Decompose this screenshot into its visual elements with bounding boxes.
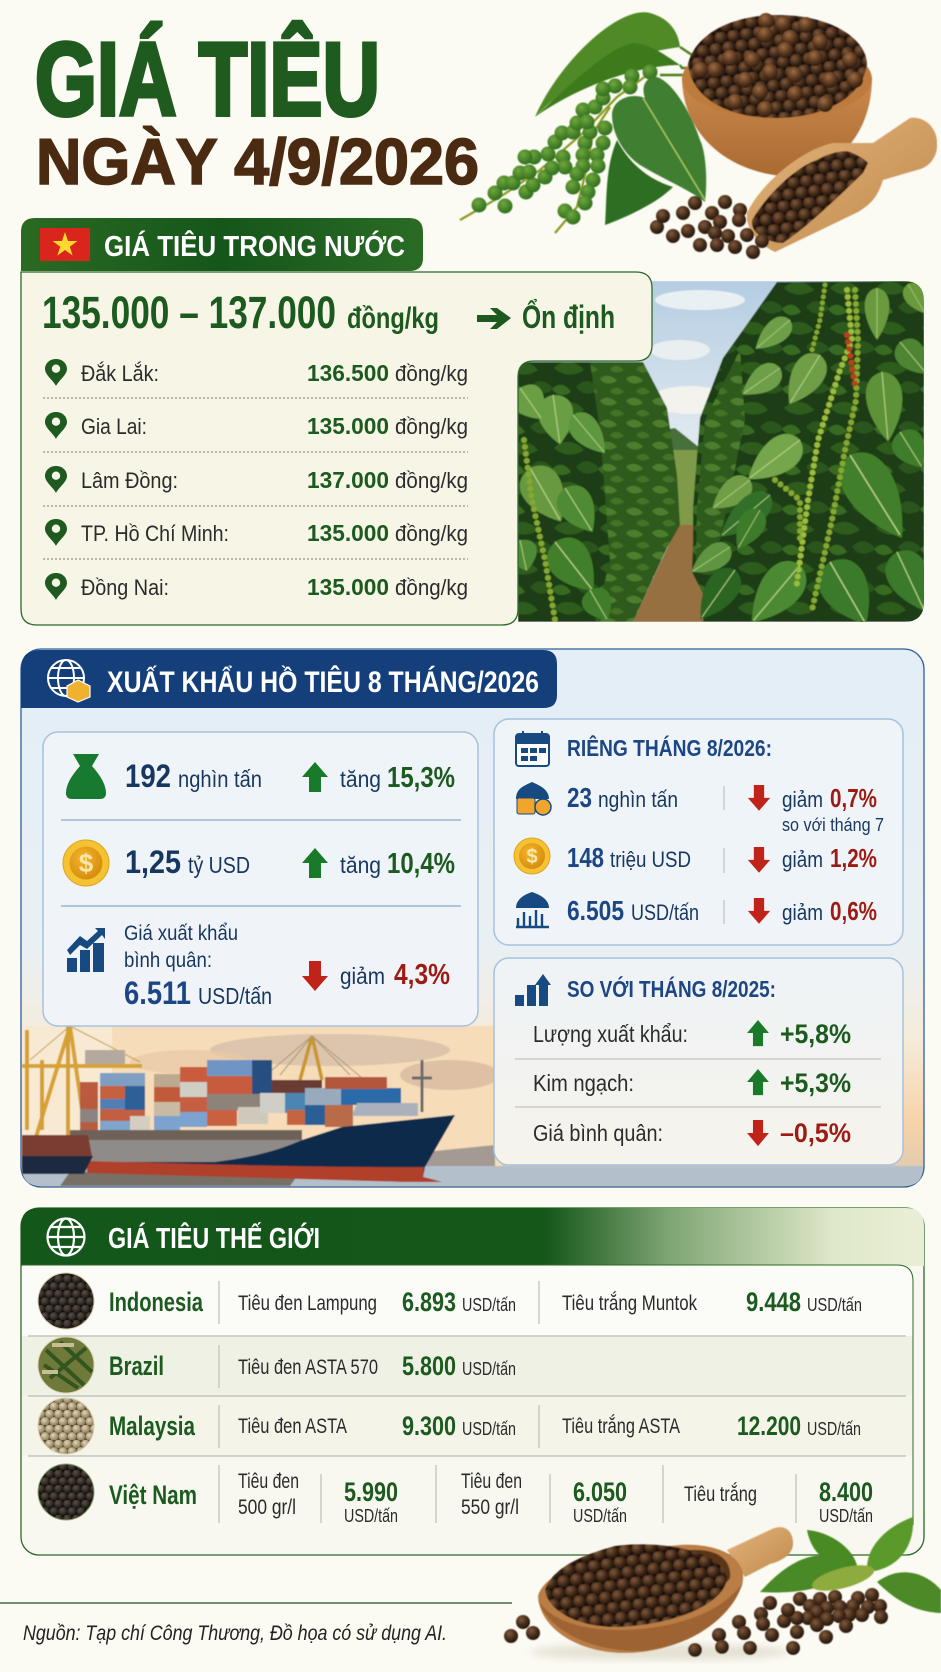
photo: pepper plantation: [518, 281, 924, 622]
row: export volume: Lượng xuất khẩu:: [533, 1021, 688, 1047]
row: average price: Giá bình quân:: [533, 1120, 663, 1146]
metric: value: 1,25: [125, 844, 181, 880]
illustration: wooden scoop with pepper: [504, 1517, 941, 1660]
headline price: đồng/kg: [347, 302, 439, 335]
row: Đắk Lắk: Đắk Lắk:: [81, 361, 159, 386]
row: turnover: +5,3%: [780, 1068, 851, 1098]
icon: bars with arrow: [515, 974, 551, 1006]
export panel background: [21, 649, 924, 1187]
row: August value: giảm: [782, 847, 823, 872]
row: Indonesia: USD/tấn: [807, 1295, 862, 1315]
row: Indonesia: Tiêu đen Lampung: [238, 1292, 377, 1315]
icon: warehouse: [516, 782, 551, 815]
photo: container ship: [22, 1026, 924, 1187]
section: world prices: [21, 1208, 924, 1555]
row: Việt Nam: 6.050: [573, 1477, 627, 1507]
metric: average price: Giá xuất khẩu: [124, 922, 238, 945]
icon: calendar: [516, 731, 549, 766]
row: Malaysia: Malaysia: [109, 1411, 196, 1441]
row: Indonesia: [38, 1273, 862, 1329]
row: TP. Hồ Chí Minh: đồng/kg: [395, 521, 468, 546]
row: August value: 1,2%: [830, 843, 877, 873]
row: Gia Lai: Gia Lai:: [81, 414, 147, 439]
icon: Vietnam flag: [40, 228, 90, 261]
title: GIÁ TIÊU: [35, 22, 380, 138]
world header band: GIÁ TIÊU THẾ GIỚI: [108, 1221, 320, 1255]
icon: price building: [516, 892, 549, 927]
row: August price: giảm: [782, 900, 823, 925]
metric: value: [125, 844, 455, 880]
row: Gia Lai: đồng/kg: [395, 414, 468, 439]
icon: coin: $: [79, 848, 94, 878]
world panel: [21, 1208, 924, 1555]
row: TP. Hồ Chí Minh: [45, 519, 468, 546]
row: Malaysia: Tiêu đen ASTA: [238, 1415, 347, 1438]
metric: average price: 6.511: [124, 975, 191, 1011]
row: Brazil: [38, 1337, 516, 1393]
title: NGÀY 4/9/2026: [36, 125, 479, 198]
row: Việt Nam: Việt Nam: [109, 1480, 197, 1510]
metric: volume: nghìn tấn: [178, 766, 262, 792]
domestic price panel: [21, 272, 652, 625]
row: Malaysia: [38, 1398, 861, 1454]
icon: coin: [63, 840, 109, 886]
row: August volume: [567, 782, 884, 835]
card: 8-month totals: [43, 732, 478, 1026]
icon: coin small: $: [526, 846, 538, 868]
row: TP. Hồ Chí Minh: 135.000: [307, 520, 389, 546]
heading: RIÊNG THÁNG 8/2026:: [567, 734, 772, 761]
icon: money bag: [66, 754, 106, 799]
export header tab: [21, 650, 557, 708]
row: August volume: nghìn tấn: [598, 787, 678, 812]
row: Brazil: Brazil: [109, 1351, 164, 1381]
metric: average price: [124, 922, 450, 1011]
row: Indonesia: Indonesia: [109, 1287, 204, 1317]
metric: value: 10,4%: [387, 848, 455, 880]
row: August volume: 23: [567, 782, 592, 813]
row: August value: triệu USD: [610, 847, 691, 872]
metric: average price: USD/tấn: [198, 983, 272, 1009]
row: average price: [533, 1118, 851, 1148]
row: Gia Lai: 135.000: [307, 413, 389, 439]
row: Đồng Nai: 135.000: [307, 574, 389, 600]
row: Lâm Đồng: 137.000: [307, 467, 389, 493]
headline price: 135.000 – 137.000: [42, 287, 336, 338]
row: Việt Nam: 5.990: [344, 1477, 398, 1507]
row: Indonesia: 9.448: [746, 1287, 801, 1317]
card: August 2026: [494, 719, 903, 1146]
section: exports: [21, 649, 924, 1187]
row: Việt Nam: 550 gr/l: [461, 1496, 519, 1519]
icon: coin small: [514, 838, 550, 874]
row: Đồng Nai: Đồng Nai:: [81, 575, 169, 600]
row: Việt Nam: USD/tấn: [344, 1506, 398, 1526]
row: Malaysia: USD/tấn: [807, 1419, 861, 1439]
row: August value: [567, 842, 877, 873]
row: Malaysia: 12.200: [737, 1411, 801, 1441]
row: August price: 0,6%: [830, 896, 877, 926]
row: export volume: +5,8%: [780, 1019, 851, 1049]
row: Việt Nam: USD/tấn: [573, 1506, 627, 1526]
section: domestic prices: [21, 218, 941, 636]
title: [35, 22, 479, 198]
row: Đắk Lắk: đồng/kg: [395, 361, 468, 386]
domestic header tab: [21, 218, 423, 271]
row: Brazil: Tiêu đen ASTA 570: [238, 1356, 378, 1379]
row: export volume: [533, 1019, 851, 1049]
world header band: [21, 1208, 924, 1266]
row: Indonesia: USD/tấn: [462, 1295, 516, 1315]
row: Đắk Lắk: [45, 359, 468, 386]
source: Nguồn: Tạp chí Công Thương, Đồ họa có sử dụng AI.: [23, 1622, 447, 1645]
row: Lâm Đồng: Lâm Đồng:: [81, 468, 178, 493]
row: Malaysia: USD/tấn: [462, 1419, 516, 1439]
row: Gia Lai: [45, 412, 468, 439]
row: August volume: so với tháng 7: [782, 815, 884, 835]
row: average price: –0,5%: [780, 1118, 851, 1148]
icon: rising chart: [67, 928, 105, 972]
row: Việt Nam: Tiêu trắng: [684, 1483, 757, 1506]
row: Việt Nam: 8.400: [819, 1477, 873, 1507]
metric: volume: 192: [125, 758, 171, 794]
row: Đồng Nai: đồng/kg: [395, 575, 468, 600]
metric: value: tăng: [340, 852, 381, 878]
icon: globe with box: [48, 660, 90, 702]
row: Việt Nam: [38, 1464, 873, 1526]
row: Việt Nam: Tiêu đen: [461, 1470, 522, 1493]
row: Đắk Lắk: 136.500: [307, 360, 389, 386]
row: August price: USD/tấn: [631, 900, 699, 925]
metric: volume: 15,3%: [387, 762, 455, 794]
card: compared with August 2025: [494, 958, 903, 1165]
metric: volume: tăng: [340, 766, 381, 792]
metric: volume: [125, 758, 455, 794]
metric: value: tỷ USD: [188, 852, 250, 878]
footer rule: [0, 1602, 512, 1604]
domestic header tab: GIÁ TIÊU TRONG NƯỚC: [104, 229, 405, 263]
row: Đồng Nai: [45, 573, 468, 600]
illustration: bowl of pepper, leaves, scoop: [460, 12, 937, 259]
row: Malaysia: Tiêu trắng ASTA: [562, 1415, 680, 1438]
row: Brazil: USD/tấn: [462, 1359, 516, 1379]
row: Brazil: 5.800: [402, 1351, 456, 1381]
metric: average price: 4,3%: [394, 959, 450, 991]
heading: SO VỚI THÁNG 8/2025:: [567, 975, 776, 1002]
icon: globe: [48, 1218, 84, 1256]
export header tab: XUẤT KHẨU HỒ TIÊU 8 THÁNG/2026: [107, 665, 539, 699]
row: Indonesia: 6.893: [402, 1287, 456, 1317]
row: August price: [567, 895, 877, 926]
row: Lâm Đồng: [45, 466, 468, 493]
row: August volume: giảm: [782, 787, 823, 812]
arrow: stable: [477, 308, 511, 329]
row: Lâm Đồng: đồng/kg: [395, 468, 468, 493]
row: August volume: 0,7%: [830, 783, 877, 813]
metric: average price: bình quân:: [124, 949, 212, 972]
row: Việt Nam: USD/tấn: [819, 1506, 873, 1526]
row: turnover: [533, 1068, 851, 1098]
row: August value: 148: [567, 842, 604, 873]
world table: [21, 1265, 913, 1526]
row: Indonesia: Tiêu trắng Muntok: [562, 1292, 697, 1315]
status: stable: Ổn định: [522, 299, 615, 335]
row: Việt Nam: Tiêu đen: [238, 1470, 299, 1493]
metric: average price: giảm: [340, 963, 385, 989]
row: August price: 6.505: [567, 895, 624, 926]
row: turnover: Kim ngạch:: [533, 1070, 634, 1096]
row: Việt Nam: 500 gr/l: [238, 1496, 296, 1519]
row: Malaysia: 9.300: [402, 1411, 456, 1441]
row: TP. Hồ Chí Minh: TP. Hồ Chí Minh:: [81, 521, 229, 546]
